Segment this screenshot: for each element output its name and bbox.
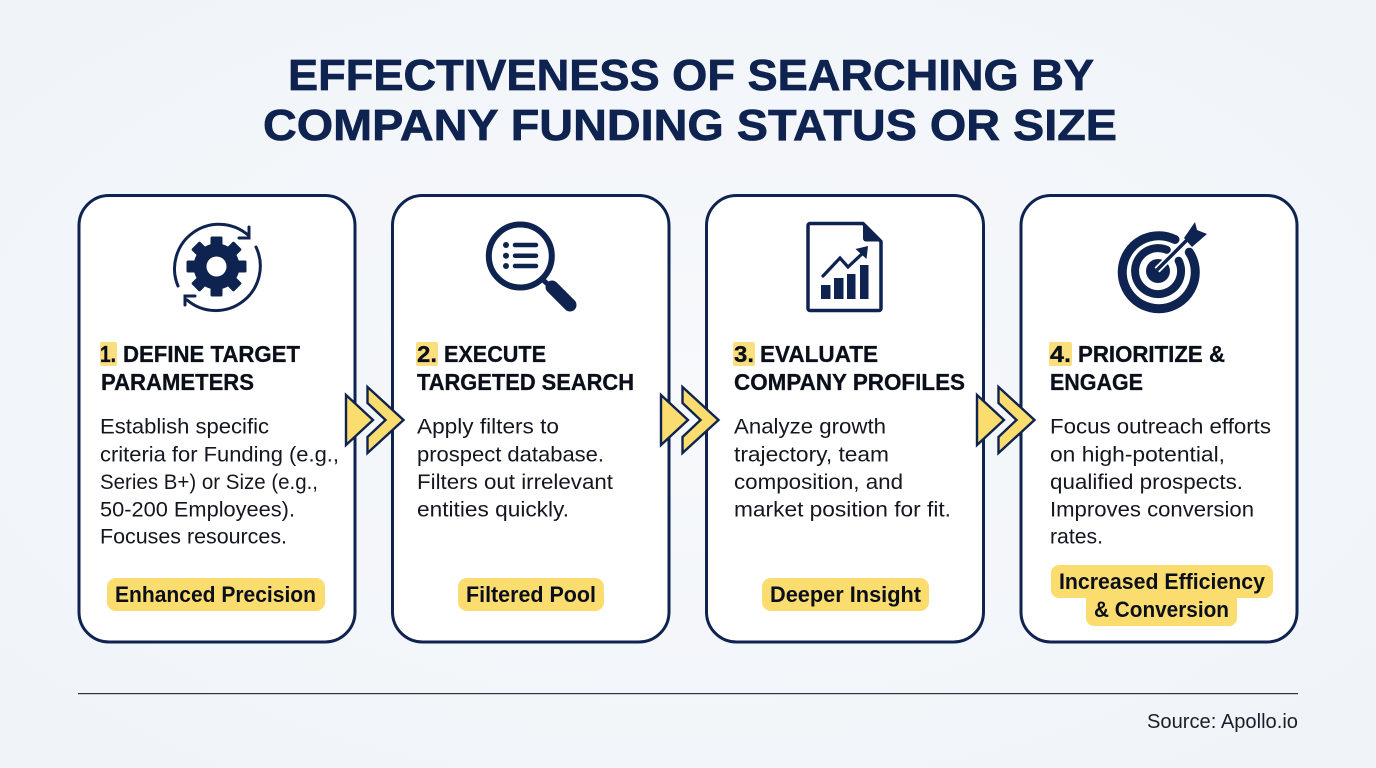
callout: deeper insight: Deeper Insight: [770, 582, 922, 607]
panel: step 1 define target parameters: [79, 196, 355, 642]
heading: [1049, 341, 1225, 395]
heading: [733, 341, 965, 395]
text block: market position for fit.: [734, 498, 951, 522]
text block: rates.: [1050, 526, 1103, 548]
heading: 1.: [100, 341, 116, 367]
heading: 2.: [417, 341, 437, 367]
text block: on high-potential,: [1050, 444, 1225, 466]
text block: Filters out irrelevant: [417, 471, 613, 494]
title: COMPANY FUNDING STATUS OR SIZE: [263, 101, 1117, 150]
heading: EXECUTE: [444, 341, 546, 367]
callout: filtered pool: Filtered Pool: [466, 582, 596, 607]
text block: Apply filters to: [417, 416, 559, 438]
panel: step 4 prioritize and engage: [1021, 196, 1297, 642]
title: [263, 51, 1117, 150]
arrow: step 1 to 2: [346, 387, 404, 453]
text block: criteria for Funding (e.g.,: [100, 444, 339, 466]
text block: [417, 416, 613, 522]
text block: Establish specific: [100, 416, 269, 438]
heading: TARGETED SEARCH: [417, 369, 634, 395]
text block: Focus outreach efforts: [1050, 416, 1271, 438]
text block: trajectory, team: [734, 444, 889, 466]
callout: increased efficiency and conversion: [1051, 565, 1273, 626]
arrow: step 2 to 3: [661, 387, 718, 453]
text block: Analyze growth: [734, 416, 886, 438]
heading: EVALUATE: [760, 341, 878, 367]
heading: PRIORITIZE &: [1078, 341, 1225, 367]
heading: COMPANY PROFILES: [734, 369, 965, 395]
panel: step 2 execute targeted search: [392, 196, 669, 642]
text block: [100, 416, 339, 548]
icon: target with arrow: [1122, 222, 1207, 309]
heading: 3.: [734, 341, 754, 367]
icon: gear with rotating arrows: [175, 224, 260, 311]
panel: step 3 evaluate company profiles: [706, 196, 984, 642]
source note: Source: Apollo.io: [1147, 711, 1298, 733]
title: EFFECTIVENESS OF SEARCHING BY: [288, 51, 1094, 100]
text block: Improves conversion: [1050, 498, 1254, 522]
callout: deeper insight: [762, 578, 929, 611]
heading: [100, 341, 300, 395]
text block: qualified prospects.: [1050, 471, 1243, 494]
text block: Focuses resources.: [100, 526, 287, 548]
text block: [1050, 416, 1271, 548]
callout: filtered pool: [458, 578, 604, 611]
heading: PARAMETERS: [101, 369, 254, 395]
text block: [734, 416, 951, 522]
text block: prospect database.: [417, 444, 604, 466]
text block: composition, and: [734, 471, 903, 494]
text block: Series B+) or Size (e.g.,: [100, 471, 318, 494]
callout: increased efficiency and conversion: Increased Efficiency: [1059, 569, 1266, 594]
text block: 50-200 Employees).: [100, 498, 295, 522]
text block: entities quickly.: [417, 498, 569, 522]
callout: increased efficiency and conversion: & Conversion: [1094, 597, 1229, 622]
heading: ENGAGE: [1050, 369, 1143, 395]
heading: DEFINE TARGET: [123, 341, 300, 367]
heading: [416, 341, 634, 395]
icon: magnifier with list: [489, 224, 570, 305]
icon: report document with chart: [808, 223, 882, 310]
heading: 4.: [1050, 341, 1071, 367]
callout: enhanced precision: Enhanced Precision: [115, 582, 316, 607]
arrow: step 3 to 4: [977, 387, 1034, 453]
